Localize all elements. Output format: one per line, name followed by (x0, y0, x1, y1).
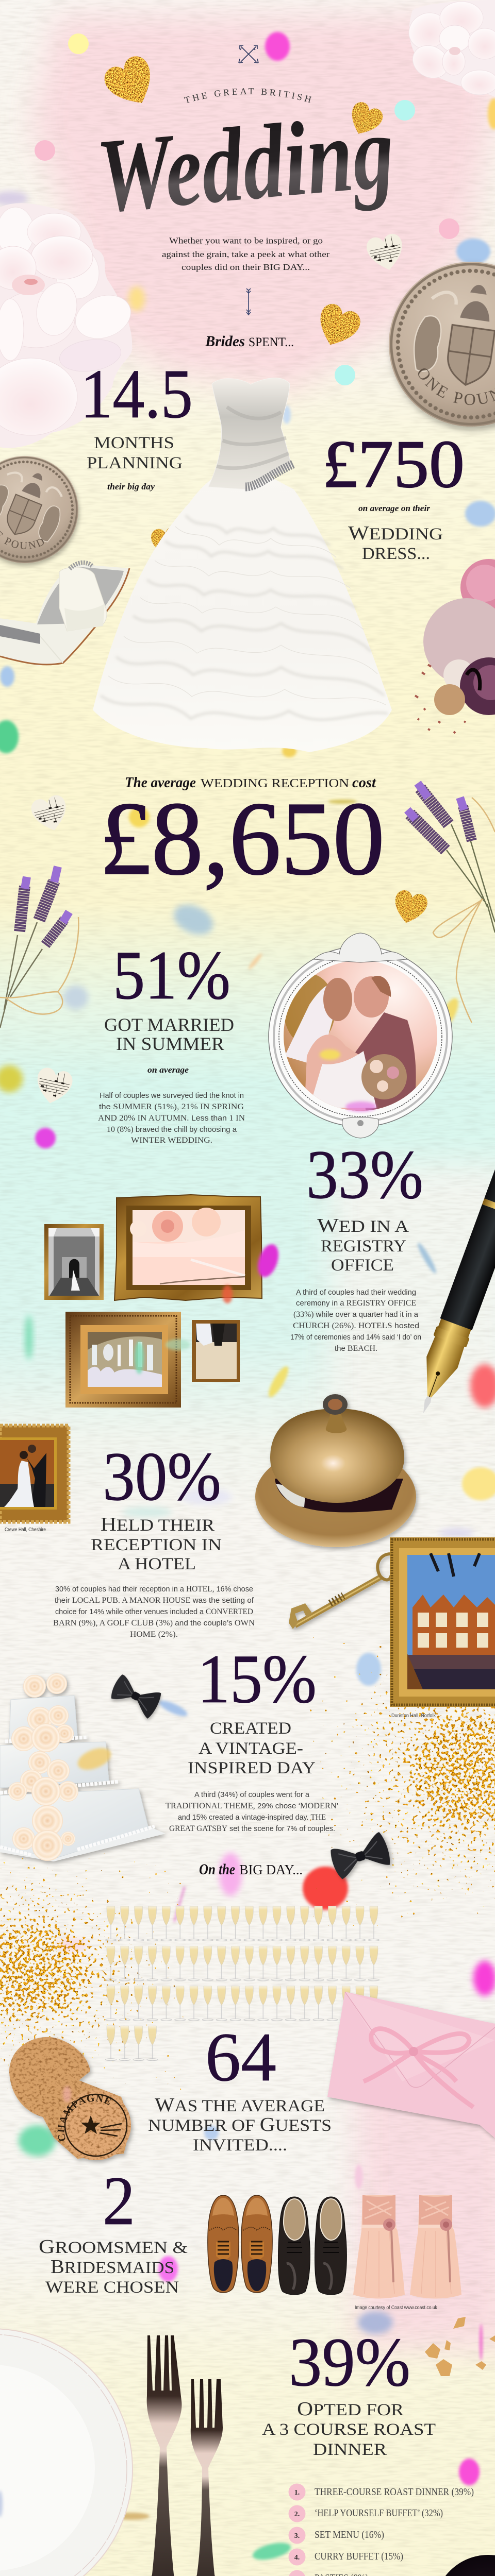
stat: 30% hotel reception: HELD THEIR (101, 1514, 214, 1535)
text block: ceremony venues: the BEACH. (335, 1344, 377, 1353)
stat: £750 dress: on average on their (358, 503, 430, 513)
icon: oval mirror frame with couple photo (269, 933, 452, 1138)
text block: ceremony venues (290, 1289, 421, 1353)
stat: 14.5 months planning: PLANNING (87, 454, 183, 472)
confetti over frames (63, 1049, 376, 2103)
text block: seasons: Half of couples we surveyed tied the knot in (100, 1092, 244, 1100)
stat: 30% hotel reception: RECEPTION IN (91, 1536, 222, 1554)
stat: 33% registry office: OFFICE (331, 1256, 394, 1275)
stat: 64 guests: WAS THE AVERAGE (155, 2094, 325, 2116)
icon: brown brogues (208, 2195, 272, 2293)
stat: 30% hotel reception: 30% (103, 1438, 221, 1515)
stat: 51% summer: IN SUMMER (116, 1033, 224, 1054)
stat: 15% vintage: INSPIRED DAY (188, 1759, 316, 1777)
stat: 15% vintage: A VINTAGE- (199, 1739, 303, 1758)
stat: 39% roast dinner: 39% (289, 2324, 410, 2401)
list numbers: 1. (294, 2489, 300, 2497)
heading: average wedding reception cost: WEDDING RECEPTION (201, 777, 349, 790)
chart: 64 champagne glasses pictogram (104, 1906, 381, 2061)
icon: wedding dress (93, 378, 392, 752)
stat: 39% roast dinner: A 3 COURSE ROAST (262, 2420, 436, 2439)
icon: lavender bunch left (0, 867, 78, 1028)
icon: vinyl record right (434, 2555, 495, 2576)
heading: average wedding reception cost: cost (352, 775, 376, 791)
stat: £750 dress: £750 (322, 426, 465, 502)
stat: 64 guests: INVITED.... (193, 2136, 287, 2155)
stat: 14.5 months planning: MONTHS (94, 434, 174, 452)
stat: 14.5 months planning (80, 355, 193, 492)
text block: reception venues: choice for 14% while other venues included a CONVERTED (55, 1607, 253, 1616)
icon: makeup powders (415, 559, 495, 733)
stat: 15% vintage: 15% (197, 1641, 317, 1718)
text block: themes (166, 1791, 338, 1833)
stat: 2 groomsmen and bridesmaids (39, 2163, 188, 2297)
text block: ceremony venues: (33%) while over a quarter had it in a (293, 1310, 419, 1319)
stat: 15% vintage (188, 1641, 317, 1777)
icon: gold frame with venue interior (65, 1312, 181, 1408)
text block: ceremony venues: ceremony in a REGISTRY OFFICE (296, 1299, 416, 1308)
text block: ceremony venues: 17% of ceremonies and 14% said ‘I do’ on (290, 1333, 421, 1342)
icon: down arrow (246, 289, 251, 315)
stat: 2 groomsmen and bridesmaids: GROOMSMEN & (39, 2236, 188, 2258)
heading: on the big day: BIG DAY... (239, 1862, 303, 1877)
title: Wedding: Wedding (93, 93, 399, 235)
icon: small frame beach (192, 1320, 240, 1382)
list labels: THREE-COURSE ROAST DINNER (39%) (315, 2486, 474, 2498)
list numbers: 4. (294, 2554, 300, 2562)
icon: photo frame black and white venue (44, 1224, 104, 1300)
list number circles (289, 2483, 305, 2576)
text block: seasons: WINTER WEDDING. (131, 1136, 212, 1145)
confetti over cake (75, 1744, 114, 1774)
text block: seasons: the SUMMER (51%), 21% IN SPRING (99, 1103, 244, 1111)
list labels: SET MENU (16%) (315, 2529, 384, 2540)
icon: forks (147, 2335, 223, 2576)
stat: £750 dress: DRESS... (362, 545, 430, 563)
icon: champagne cork (8, 2037, 135, 2165)
heading: average wedding reception cost: The average (125, 775, 196, 791)
icon: sheet music hearts (29, 232, 407, 1107)
icon: brass key (289, 1554, 391, 1629)
stat: 30% hotel reception (91, 1438, 222, 1573)
text block: seasons: AND 20% IN AUTUMN. Less than 1 IN (98, 1114, 245, 1123)
icon: champagne cork: CHAMPAGNE (58, 2095, 111, 2141)
icon: crossed arrows (239, 45, 258, 63)
icon: bridesmaid dresses (353, 2195, 461, 2299)
stat: 64 guests: 64 (205, 2019, 276, 2096)
stat: 64 guests (148, 2019, 332, 2155)
icon: service bell (255, 1394, 416, 1547)
text block: themes: A third (34%) of couples went for a (194, 1791, 310, 1799)
stat: 33% registry office: 33% (306, 1137, 423, 1213)
stat: 39% roast dinner: DINNER (313, 2441, 387, 2459)
icon: pound coin top right (378, 251, 495, 437)
caption: Dunston Hall: Dunston Hall, Norfolk (391, 1713, 436, 1719)
heading: on the big day: On the (199, 1861, 235, 1878)
icon: gold glitter scatter right (309, 1613, 495, 1927)
intro text (162, 236, 329, 272)
stat: 51% summer (104, 937, 234, 1075)
stat: 2 groomsmen and bridesmaids: 2 (103, 2163, 135, 2240)
list labels: CURRY BUFFET (15%) (315, 2551, 403, 2562)
stat: £8,650: £8,650 (100, 781, 385, 897)
caption: Crewe Hall: Crewe Hall, Cheshire (5, 1527, 46, 1533)
text block: reception venues: 30% of couples had their reception in a HOTEL, 16% chose (55, 1585, 253, 1594)
stat: 39% roast dinner (262, 2324, 436, 2459)
stat: 15% vintage: CREATED (210, 1719, 291, 1738)
list numbers: 3. (294, 2532, 300, 2540)
icon: bow tie one (108, 1672, 163, 1720)
stat: 33% registry office (306, 1137, 423, 1275)
icon: Dunston Hall frame (390, 1537, 495, 1707)
icon: bottom left peony (0, 203, 137, 448)
stat: 51% summer: 51% (113, 937, 230, 1014)
stat: 64 guests: NUMBER OF GUESTS (148, 2114, 332, 2136)
text block: ceremony venues: CHURCH (26%). HOTELS hosted (293, 1321, 419, 1330)
heading: brides spent: SPENT... (249, 335, 294, 349)
list labels: ‘HELP YOURSELF BUFFET’ (32%) (315, 2507, 443, 2519)
icon: Crewe Hall frame (0, 1426, 69, 1522)
list numbers (294, 2489, 300, 2576)
text block: themes: TRADITIONAL THEME, 29% chose ‘ MODERN’ (166, 1802, 338, 1810)
intro text: Whether you want to be inspired, or go (169, 236, 323, 245)
text block: themes: and 15% created a vintage-inspired day. THE (178, 1813, 326, 1822)
icon: wedding cake (0, 1673, 166, 1861)
heading: the great British: THE GREAT BRITISH (184, 88, 311, 103)
icon: lavender bunch right (407, 783, 495, 1023)
text block: reception venues (53, 1585, 255, 1639)
icon: top right peony (402, 0, 495, 97)
heading: on the big day (199, 1861, 303, 1878)
stat: £750 dress: WEDDING (348, 522, 443, 544)
heading: average wedding reception cost (125, 775, 376, 791)
stat: 30% hotel reception: A HOTEL (118, 1555, 196, 1573)
stat: 14.5 months planning: 14.5 (80, 355, 193, 433)
icon: dinner plate (0, 2329, 133, 2576)
icon: gold glitter scatter left (0, 1850, 186, 2092)
icon: pound coin left (0, 440, 94, 579)
text block: ceremony venues: A third of couples had their wedding (296, 1289, 416, 1297)
icon: gilded frame with roses and pen (114, 1195, 262, 1300)
icon: pink envelope with ribbon (327, 1992, 495, 2138)
text block: reception venues: BARN (9%), A GOLF CLUB (3%) and the couple’s OWN (53, 1619, 255, 1628)
list numbers: 2. (294, 2511, 300, 2518)
stat: £750 dress (322, 426, 465, 563)
stat: 33% registry office: WED IN A (317, 1215, 409, 1236)
stat: 2 groomsmen and bridesmaids: BRIDESMAIDS (51, 2256, 174, 2278)
icon: gold glitter hearts (100, 52, 430, 927)
intro text: against the grain, take a peek at what other (162, 249, 329, 259)
stat: 51% summer: GOT MARRIED (104, 1014, 234, 1035)
text block: reception venues: their LOCAL PUB. A MANOR HOUSE was the setting of (55, 1596, 254, 1605)
stat: 14.5 months planning: their big day (107, 482, 155, 492)
text block: seasons (98, 1092, 245, 1145)
text block: reception venues: HOME (2%). (130, 1630, 178, 1639)
icon: fountain pen (407, 1165, 495, 1419)
icon: wedding shoe (0, 563, 129, 666)
stat: 2 groomsmen and bridesmaids: WERE CHOSEN (45, 2278, 179, 2297)
heading: brides spent: Brides (205, 333, 245, 350)
list: dinner choices (289, 2483, 474, 2576)
icon: pastry crumbs (63, 2317, 495, 2576)
text block: seasons: 10 (8%) braved the chill by choosing a (107, 1125, 237, 1134)
stat: 51% summer: on average (147, 1065, 189, 1075)
stat: 33% registry office: REGISTRY (321, 1237, 406, 1256)
stat: 39% roast dinner: OPTED FOR (297, 2398, 404, 2420)
text block: themes: GREAT GATSBY set the scene for 7% of couples. (169, 1824, 335, 1833)
intro text: couples did on their BIG DAY... (182, 262, 310, 272)
icon: bow tie two (328, 1831, 392, 1882)
caption: Coast image credit: Image courtesy of Coast www.coast.co.uk (355, 2305, 438, 2311)
icon: black shoes (278, 2197, 346, 2295)
list labels (315, 2486, 474, 2576)
heading: brides spent (205, 333, 294, 350)
